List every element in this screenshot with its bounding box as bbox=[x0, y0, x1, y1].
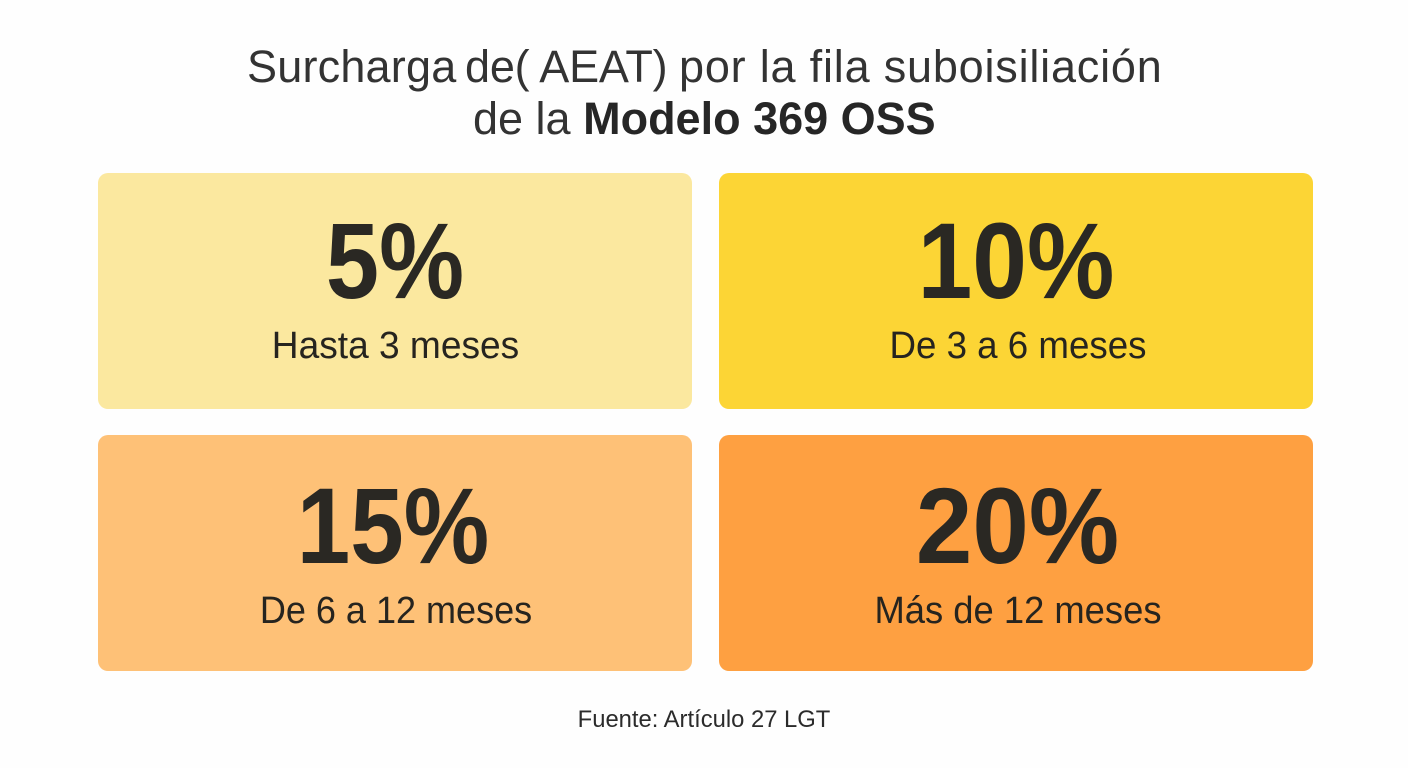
value: 5%: 5% bbox=[326, 200, 464, 321]
label: de 3 a 6 meses: De 3 a 6 meses bbox=[889, 325, 1147, 367]
panel: 20% bbox=[719, 435, 1313, 671]
value: 10%: 10% bbox=[918, 200, 1114, 321]
title: Surcharga bbox=[247, 41, 456, 92]
label: más de 12 meses: Más de 12 meses bbox=[874, 590, 1162, 632]
value: 20%: 20% bbox=[916, 465, 1119, 586]
title: por la fila suboisiliación bbox=[679, 41, 1163, 92]
value: 15%: 15% bbox=[297, 465, 489, 586]
title: de la Modelo 369 OSS bbox=[473, 93, 936, 144]
label: hasta 3 meses: Hasta 3 meses bbox=[272, 325, 519, 367]
label: de 6 a 12 meses: De 6 a 12 meses bbox=[260, 590, 532, 632]
source note: Fuente: Artículo 27 LGT bbox=[578, 706, 830, 733]
panel: 15% bbox=[98, 435, 692, 671]
panel: 5% bbox=[98, 173, 692, 409]
title bbox=[247, 41, 1163, 144]
panel: 10% bbox=[719, 173, 1313, 409]
title: de( AEAT) bbox=[465, 41, 667, 92]
